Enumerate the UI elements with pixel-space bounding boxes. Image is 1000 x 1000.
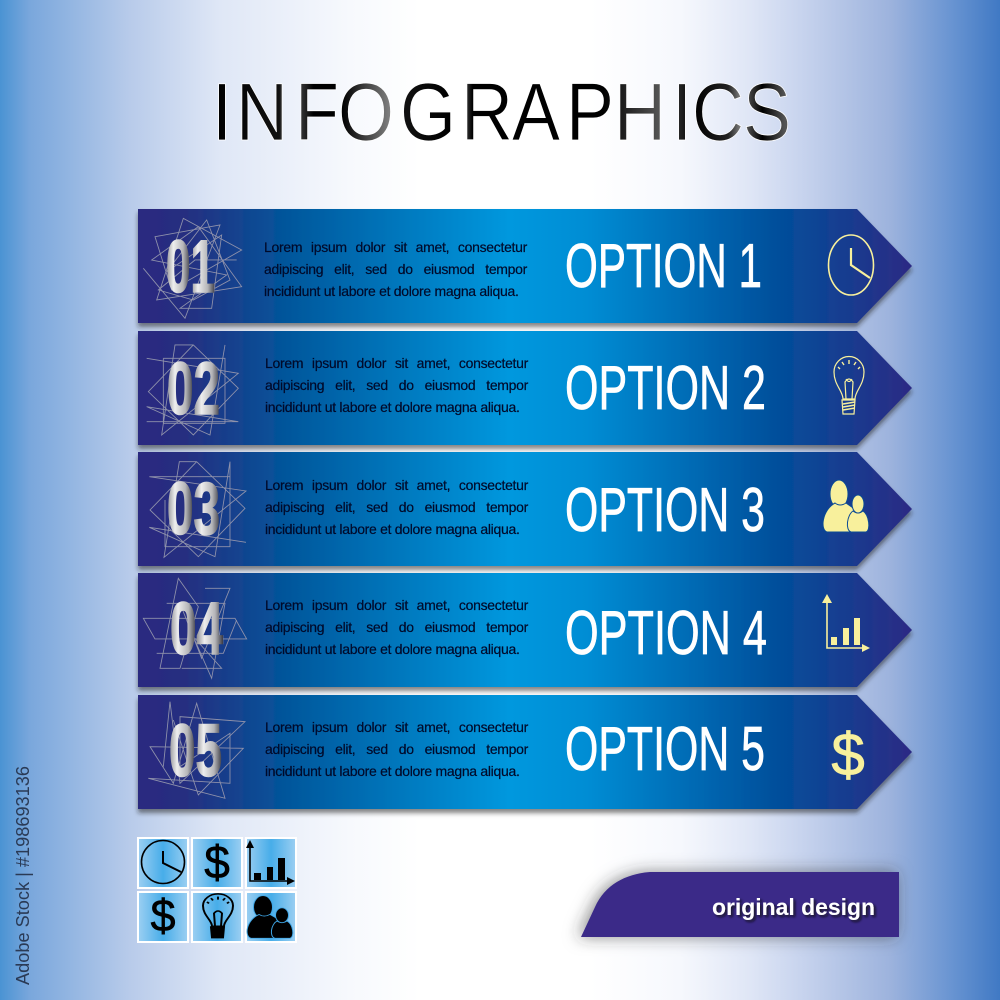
- icon: light bulb: [834, 356, 864, 414]
- description 2: adipiscing elit, sed do eiusmod tempor: [265, 377, 528, 393]
- option 1 label: OPTION 1: [565, 232, 762, 301]
- title: INFOGRAPHICS: [212, 67, 791, 158]
- number 01 with star lines: 01: [166, 225, 215, 308]
- option 4 label: OPTION 4: [565, 599, 767, 668]
- description 5: Lorem ipsum dolor sit amet, consectetur: [265, 719, 528, 735]
- arrow banner 2: [138, 331, 912, 445]
- description 4: incididunt ut labore et dolore magna aliqua.: [265, 641, 520, 657]
- option 2 label: OPTION 2: [565, 354, 766, 423]
- description 2: [265, 355, 528, 416]
- number 03 with star lines: 03: [167, 467, 220, 550]
- panel: option 2: [134, 331, 914, 452]
- panel: option 3: [134, 452, 914, 573]
- tile: clock: [138, 838, 188, 888]
- description 2: incididunt ut labore et dolore magna aliqua.: [265, 399, 520, 415]
- description 1: incididunt ut labore et dolore magna aliqua.: [264, 283, 519, 299]
- description 4: adipiscing elit, sed do eiusmod tempor: [265, 619, 528, 635]
- number 01 with star lines: [143, 218, 242, 318]
- arrow banner 3: [138, 452, 912, 566]
- number 04 with star lines: 04: [170, 587, 223, 670]
- tile: chart: [246, 838, 296, 888]
- panel: option 4: [134, 573, 914, 694]
- arrow banner 5: [138, 695, 912, 809]
- tile: dollar: [192, 836, 242, 888]
- arrow banner 1: [138, 209, 912, 323]
- description 4: [265, 597, 528, 658]
- panel: option 5: [134, 695, 914, 816]
- icon tile grid: [137, 836, 297, 943]
- icon: people: [823, 480, 869, 532]
- description 1: [264, 239, 528, 300]
- number 03 with star lines: [149, 462, 246, 557]
- description 1: Lorem ipsum dolor sit amet, consectetur: [264, 239, 527, 255]
- description 5: [265, 719, 528, 780]
- tile: dollar 2: $: [150, 890, 176, 941]
- tile: dollar: $: [204, 836, 230, 888]
- panel: option 1: [134, 209, 914, 330]
- number 05 with star lines: 05: [169, 709, 222, 792]
- tile: bulb: [192, 892, 242, 942]
- icon: bar chart: [822, 594, 870, 652]
- icon: dollar: $: [831, 721, 865, 788]
- description 2: Lorem ipsum dolor sit amet, consectetur: [265, 355, 528, 371]
- number 02 with star lines: [147, 345, 238, 435]
- description 4: Lorem ipsum dolor sit amet, consectetur: [265, 597, 528, 613]
- stock image id: Adobe Stock | #198693136: [13, 766, 33, 985]
- description 3: adipiscing elit, sed do eiusmod tempor: [265, 499, 528, 515]
- number 04 with star lines: [143, 578, 247, 678]
- arrow banner 4: [138, 573, 912, 687]
- description 3: Lorem ipsum dolor sit amet, consectetur: [265, 477, 528, 493]
- number 02 with star lines: 02: [167, 347, 220, 430]
- description 3: incididunt ut labore et dolore magna aliqua.: [265, 521, 520, 537]
- original design badge: [570, 860, 908, 949]
- option 3 label: OPTION 3: [565, 476, 765, 545]
- description 1: adipiscing elit, sed do eiusmod tempor: [264, 261, 527, 277]
- icon: clock: [828, 235, 874, 295]
- description 5: incididunt ut labore et dolore magna aliqua.: [265, 763, 520, 779]
- tile: people: [246, 892, 296, 942]
- number 05 with star lines: [148, 702, 245, 798]
- tile: dollar 2: [138, 890, 188, 942]
- badge text: original design: [712, 894, 875, 920]
- option 5 label: OPTION 5: [565, 715, 765, 784]
- description 5: adipiscing elit, sed do eiusmod tempor: [265, 741, 528, 757]
- description 3: [265, 477, 528, 538]
